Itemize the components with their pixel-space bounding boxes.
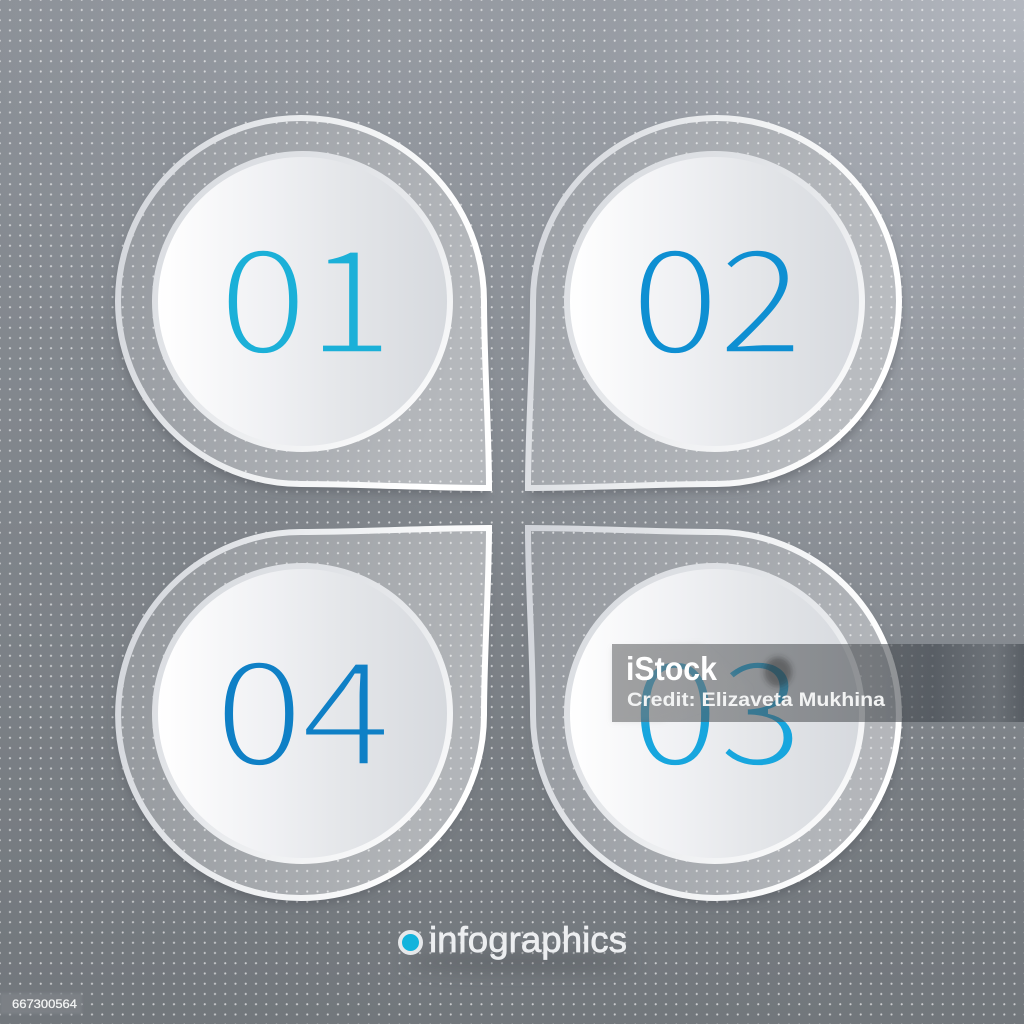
disc 02 [567,154,862,449]
number 03 [630,598,804,809]
number 03: 0 [630,598,720,809]
disc 04 [155,566,450,861]
number 04 [214,598,392,809]
number 01: 0 [218,186,308,397]
watermark credit text: Credit: Elizaveta Mukhina [627,690,885,711]
disc 01 [155,154,450,449]
icon: blue dot [400,932,421,953]
number 02 [630,186,804,397]
number 04: 0 [214,598,304,809]
drop panel 03 [528,528,901,905]
watermark logo text: iStock [626,650,718,687]
drop panel 02 [528,118,901,495]
number 04: 4 [300,598,392,809]
number 01: 1 [306,186,394,397]
label text: infographics [429,919,627,960]
number 03: 3 [717,598,804,809]
infographics label [400,919,635,972]
image id: 667300564 [12,997,77,1011]
image id [0,993,82,1014]
watermark band [612,644,1024,722]
number 02: 0 [630,186,720,397]
drop panel 04 [116,528,489,905]
disc 03 [567,566,862,861]
drop panel 01 [116,118,489,495]
number 02: 2 [717,186,804,397]
number 01 [218,186,394,397]
